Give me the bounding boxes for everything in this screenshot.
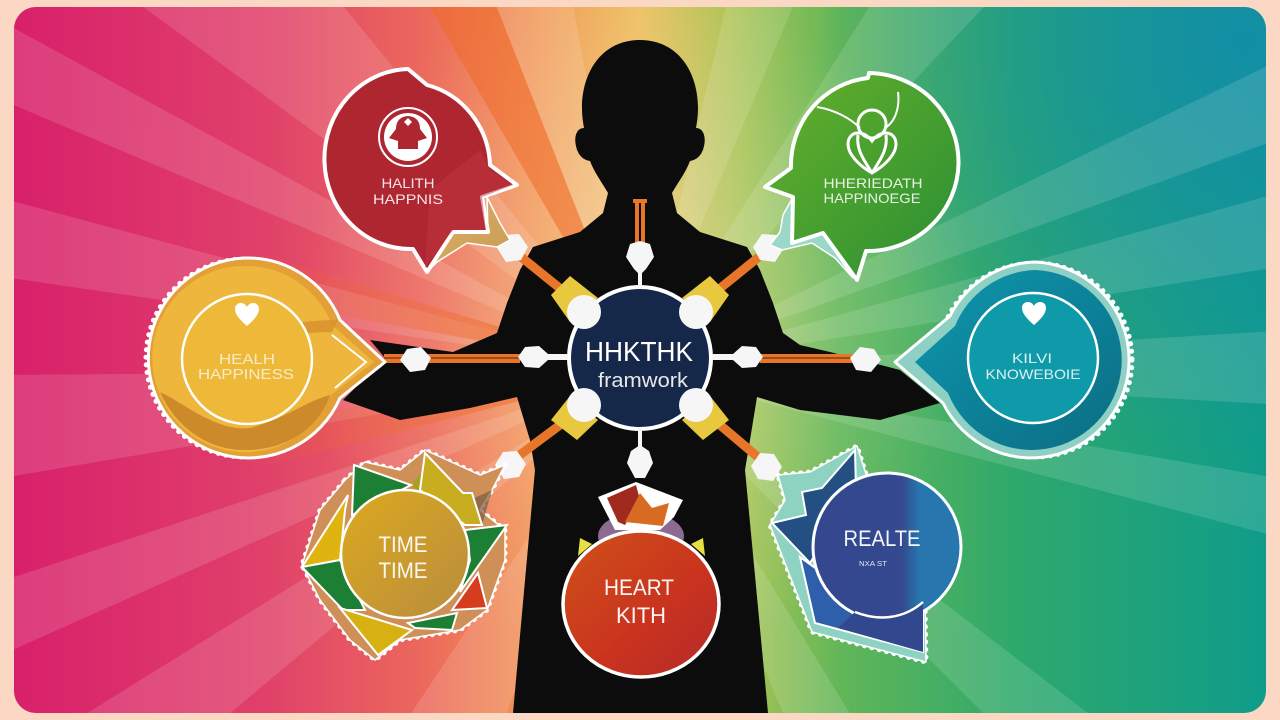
connector: lower right — [679, 388, 782, 481]
connector: right arm — [712, 346, 881, 372]
bubble label line two: HAPPINESS — [198, 366, 294, 383]
icon: heart — [235, 303, 259, 326]
person silhouette — [343, 40, 940, 713]
hub subtitle: framwork — [598, 370, 689, 392]
bubble small text: NXA ST — [859, 561, 888, 568]
bubble: health yellow — [146, 258, 385, 458]
bubble: knowledge teal — [895, 262, 1132, 458]
connector: upper left — [497, 234, 601, 329]
connector: left arm — [384, 346, 568, 372]
bubble label line two: KITH — [616, 603, 666, 628]
connector: lower left — [495, 388, 601, 479]
bubble label: HEALH — [219, 351, 275, 368]
hub title: HHKTHK — [585, 336, 693, 367]
bubble: time star — [302, 450, 507, 660]
bubble label: REALTE — [844, 526, 920, 551]
icon: shirt in ring — [379, 108, 437, 166]
bubble label: HHERIEDATH — [824, 175, 922, 191]
bubble: realize blue — [770, 446, 961, 662]
bubble: heart kith — [563, 482, 719, 677]
central hub — [569, 287, 711, 429]
bubble label line two: KNOWEBOIE — [986, 366, 1080, 382]
connector: bottom — [627, 428, 653, 478]
icon: heart — [1022, 302, 1046, 325]
bubble label line two: HAPPINOEGE — [824, 190, 920, 206]
connector: neck — [626, 199, 654, 289]
bubble: knowledge green — [765, 73, 959, 280]
bubble label line two: TIME — [378, 558, 428, 583]
connector: upper right — [679, 234, 784, 329]
icon: heart leaf — [817, 92, 898, 173]
bubble label: HALITH — [382, 175, 434, 191]
bubble: health happiness red — [324, 69, 517, 272]
bubble label: HEART — [604, 575, 674, 600]
bubble label line two: HAPPNIS — [373, 191, 443, 207]
bubble label: TIME — [378, 532, 428, 557]
bubble label: KILVI — [1012, 350, 1052, 366]
